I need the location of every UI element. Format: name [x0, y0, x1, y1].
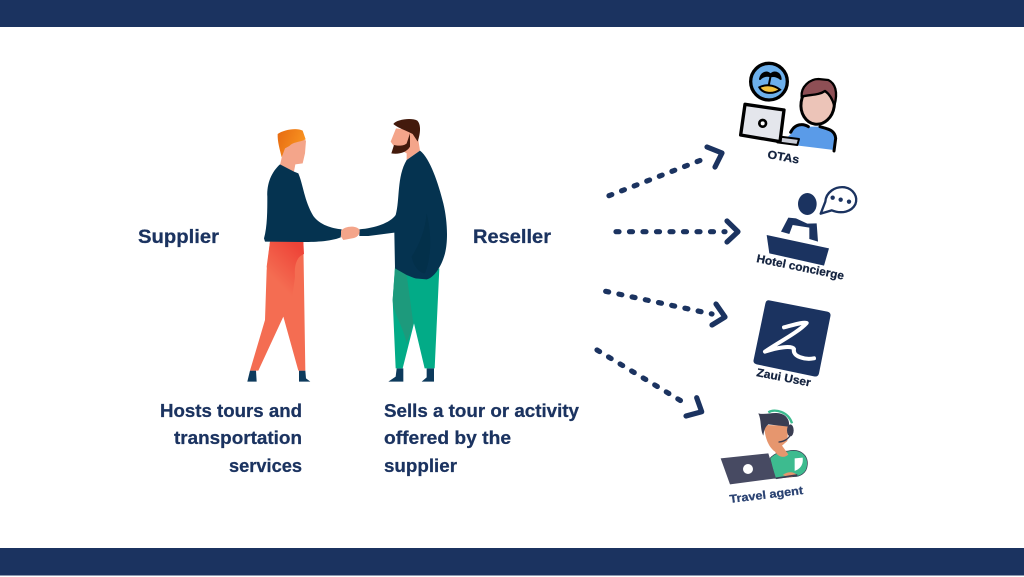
- text block: supplier description: transportation: [174, 428, 302, 448]
- heading: Reseller: Reseller: [473, 227, 552, 248]
- text block: reseller description: supplier: [384, 456, 457, 476]
- handshake: [341, 227, 360, 240]
- text block: supplier description: [160, 401, 302, 476]
- text block: reseller description: [384, 401, 579, 476]
- figure: reseller: [359, 119, 447, 382]
- illustration: supplier and reseller shaking hands: [247, 119, 447, 382]
- label: Travel agent: Travel agent: [729, 485, 804, 506]
- icon: travel agent with headset and laptop: [721, 411, 807, 484]
- top banner: [0, 0, 1024, 27]
- figure: supplier: [247, 129, 342, 382]
- label: Hotel concierge: Hotel concierge: [755, 253, 845, 283]
- arrow: to Travel agent: [597, 350, 702, 416]
- arrow: to Zaui User: [606, 291, 725, 325]
- label: Zaui User: Zaui User: [755, 367, 812, 390]
- label: OTAs: OTAs: [766, 149, 800, 167]
- text block: reseller description: Sells a tour or activity: [384, 401, 579, 421]
- icon: hotel concierge at desk with speech bubble: [767, 187, 856, 266]
- heading: Supplier: Supplier: [138, 227, 220, 248]
- icon: OTAs person with laptop: [741, 63, 837, 151]
- icon: Zaui logo: [753, 300, 831, 377]
- text block: reseller description: offered by the: [384, 428, 511, 448]
- arrow: to Hotel concierge: [616, 221, 738, 242]
- bottom banner: [0, 548, 1024, 576]
- text block: supplier description: services: [229, 456, 302, 476]
- arrow: to OTAs: [609, 147, 722, 196]
- text block: supplier description: Hosts tours and: [160, 401, 302, 421]
